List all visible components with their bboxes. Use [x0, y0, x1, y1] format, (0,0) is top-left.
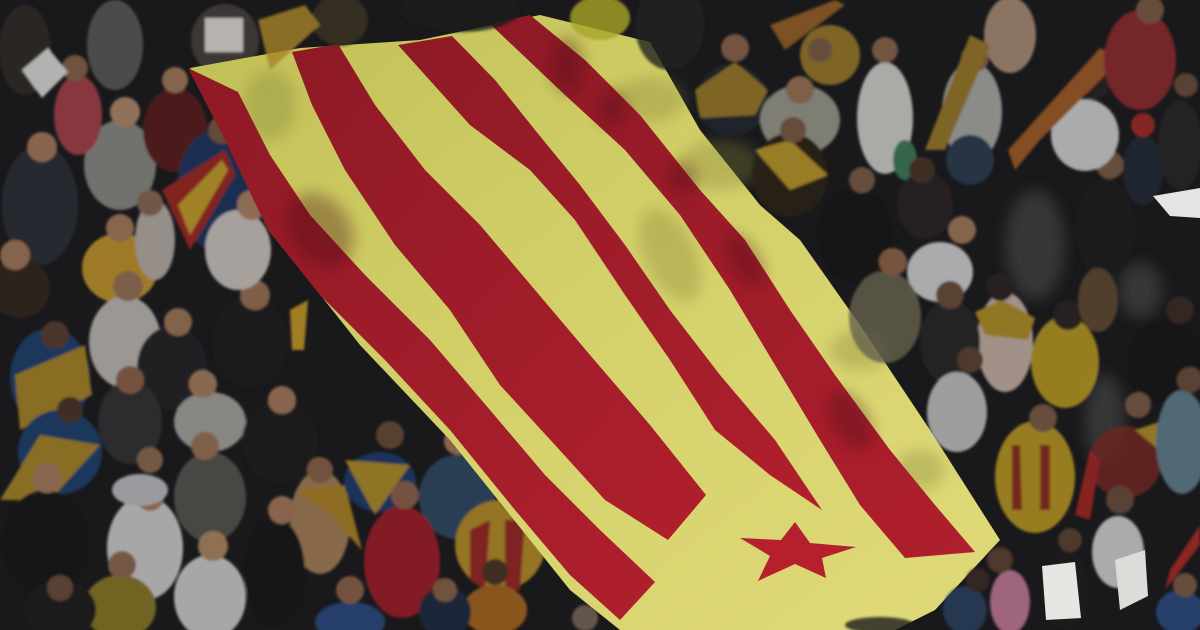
pavement patches [1005, 190, 1162, 465]
white protest signs and papers [1042, 188, 1200, 620]
stripe shadows [272, 37, 882, 457]
crowd on the top and right [258, 0, 1200, 630]
red star [740, 522, 856, 581]
red stripe 1 [188, 68, 655, 620]
red stripe 2 [292, 44, 706, 540]
fold shading [244, 70, 945, 490]
giant flag [188, 15, 1000, 630]
red stripe 4 [490, 15, 975, 558]
red stripe 3 [398, 36, 822, 510]
flag field: yellow [190, 15, 1000, 630]
crowd on the left [0, 0, 598, 630]
